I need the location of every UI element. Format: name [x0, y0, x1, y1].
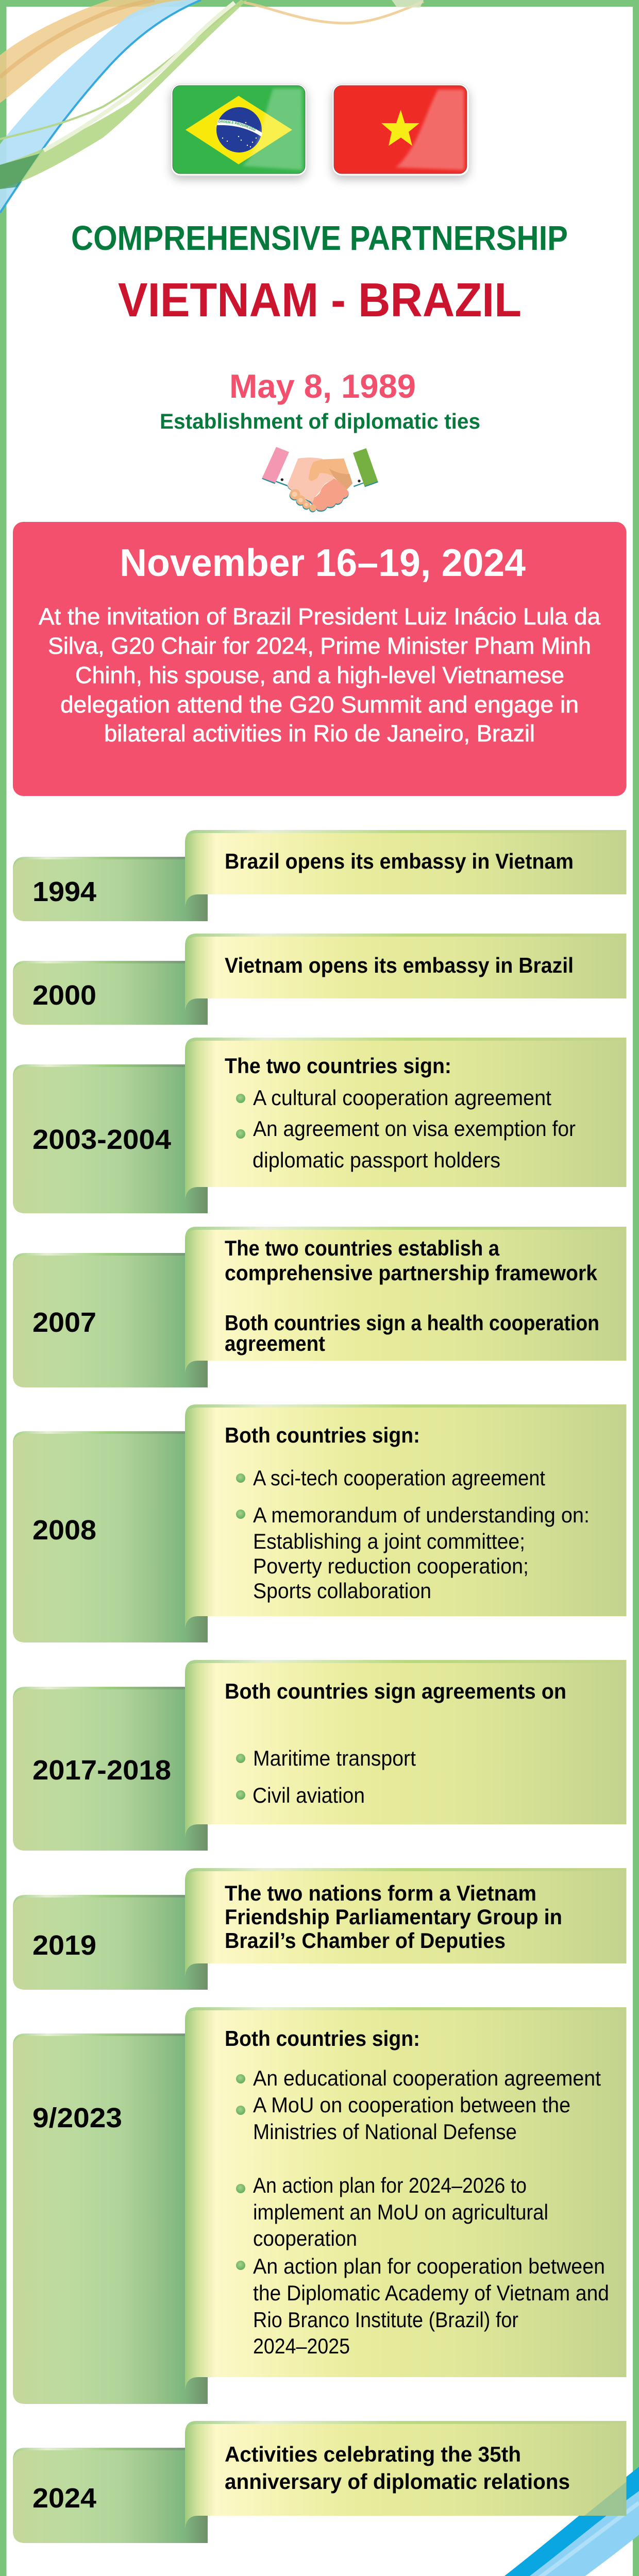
event text: [225, 1423, 590, 1603]
event text: The two nations form a Vietnam: [225, 1881, 536, 1905]
timeline item: 2017-2018: [13, 1660, 627, 1851]
event text: the Diplomatic Academy of Vietnam and: [253, 2281, 609, 2305]
timeline item: 2019: [13, 1868, 627, 1990]
event text: A MoU on cooperation between the: [253, 2093, 570, 2117]
event text: Ministries of National Defense: [253, 2120, 517, 2144]
title: Vietnam - Brazil: VIETNAM - BRAZIL: [118, 273, 522, 327]
timeline item: 2024: [13, 2421, 627, 2543]
event text: [225, 1881, 562, 1953]
event text: Activities celebrating the 35th: [225, 2442, 521, 2466]
flag: Vietnam: [332, 84, 469, 179]
event text: diplomatic passport holders: [253, 1148, 500, 1172]
subtitle: establishment of diplomatic ties: Establishment of diplomatic ties: [160, 409, 480, 433]
event text: Rio Branco Institute (Brazil) for: [253, 2308, 518, 2332]
event text: anniversary of diplomatic relations: [225, 2469, 570, 2494]
year: 2019: [32, 1930, 96, 1961]
year: 2003-2004: [32, 1124, 171, 1155]
timeline item: 1994: [13, 830, 627, 921]
panel body text: Silva, G20 Chair for 2024, Prime Minister Pham Minh: [48, 633, 591, 659]
event text: A cultural cooperation agreement: [253, 1086, 551, 1110]
event text: Brazil’s Chamber of Deputies: [225, 1928, 506, 1953]
date: May 8, 1989: May 8, 1989: [229, 367, 416, 405]
event text: A memorandum of understanding on:: [253, 1503, 590, 1527]
event text: The two countries sign:: [225, 1054, 451, 1078]
year: 2000: [32, 980, 96, 1011]
event text: A sci-tech cooperation agreement: [253, 1466, 545, 1490]
timeline item: 2007: [13, 1227, 627, 1387]
event text: Establishing a joint committee;: [253, 1529, 525, 1553]
event text: Friendship Parliamentary Group in: [225, 1905, 562, 1929]
timeline item: 9/2023: [13, 2007, 627, 2404]
event text: Both countries sign agreements on: [225, 1679, 566, 1703]
year: 2024: [32, 2483, 96, 2514]
event text: 2024–2025: [253, 2334, 350, 2358]
event text: agreement: [225, 1331, 325, 1355]
event text: An agreement on visa exemption for: [253, 1116, 576, 1141]
panel body text: delegation attend the G20 Summit and engage in: [60, 691, 579, 718]
event text: implement an MoU on agricultural: [253, 2200, 548, 2224]
event text: Brazil opens its embassy in Vietnam: [225, 849, 574, 873]
event text: Vietnam opens its embassy in Brazil: [225, 953, 574, 977]
year: 2007: [32, 1307, 96, 1338]
flag: Brazil: ORDEM E PROGRESSO: [218, 121, 256, 131]
panel body text: Chinh, his spouse, and a high-level Vietnamese: [75, 662, 564, 688]
flag: Brazil: [166, 82, 312, 184]
panel body text: bilateral activities in Rio de Janeiro, Brazil: [104, 720, 535, 747]
panel heading: November 16–19, 2024: [120, 541, 526, 584]
event text: An action plan for cooperation between: [253, 2254, 605, 2278]
event text: An action plan for 2024–2026 to: [253, 2173, 527, 2197]
event text: Maritime transport: [253, 1746, 416, 1770]
title: Comprehensive Partnership: COMPREHENSIVE PARTNERSHIP: [71, 219, 568, 258]
event text: [225, 2026, 609, 2358]
timeline item: 2000: [13, 934, 627, 1025]
event text: Poverty reduction cooperation;: [253, 1554, 529, 1578]
year: 2017-2018: [32, 1755, 171, 1786]
icon: handshake: [262, 447, 378, 512]
event text: [225, 1679, 566, 1807]
event text: Civil aviation: [253, 1783, 365, 1807]
year: 2008: [32, 1515, 96, 1546]
event text: The two countries establish a: [225, 1236, 500, 1260]
event text: An educational cooperation agreement: [253, 2066, 601, 2090]
event text: [225, 1054, 576, 1172]
year: 9/2023: [32, 2103, 122, 2133]
panel: November 16-19, 2024 visit: [13, 522, 627, 796]
timeline item: 2003-2004: [13, 1038, 627, 1213]
event text: cooperation: [253, 2226, 357, 2250]
timeline item: 2008: [13, 1404, 627, 1642]
decorative ribbons: top left: [0, 0, 424, 213]
event text: Both countries sign a health cooperation: [225, 1311, 599, 1335]
event text: [225, 2442, 570, 2494]
event text: comprehensive partnership framework: [225, 1261, 598, 1285]
year: 1994: [32, 876, 96, 907]
event text: Sports collaboration: [253, 1579, 431, 1603]
event text: [225, 1236, 599, 1355]
event text: Both countries sign:: [225, 2026, 420, 2050]
panel body text: At the invitation of Brazil President Luiz Inácio Lula da: [39, 603, 601, 630]
panel body text: [39, 603, 601, 747]
decorative ribbons: bottom: [0, 2467, 639, 2576]
event text: Both countries sign:: [225, 1423, 420, 1447]
